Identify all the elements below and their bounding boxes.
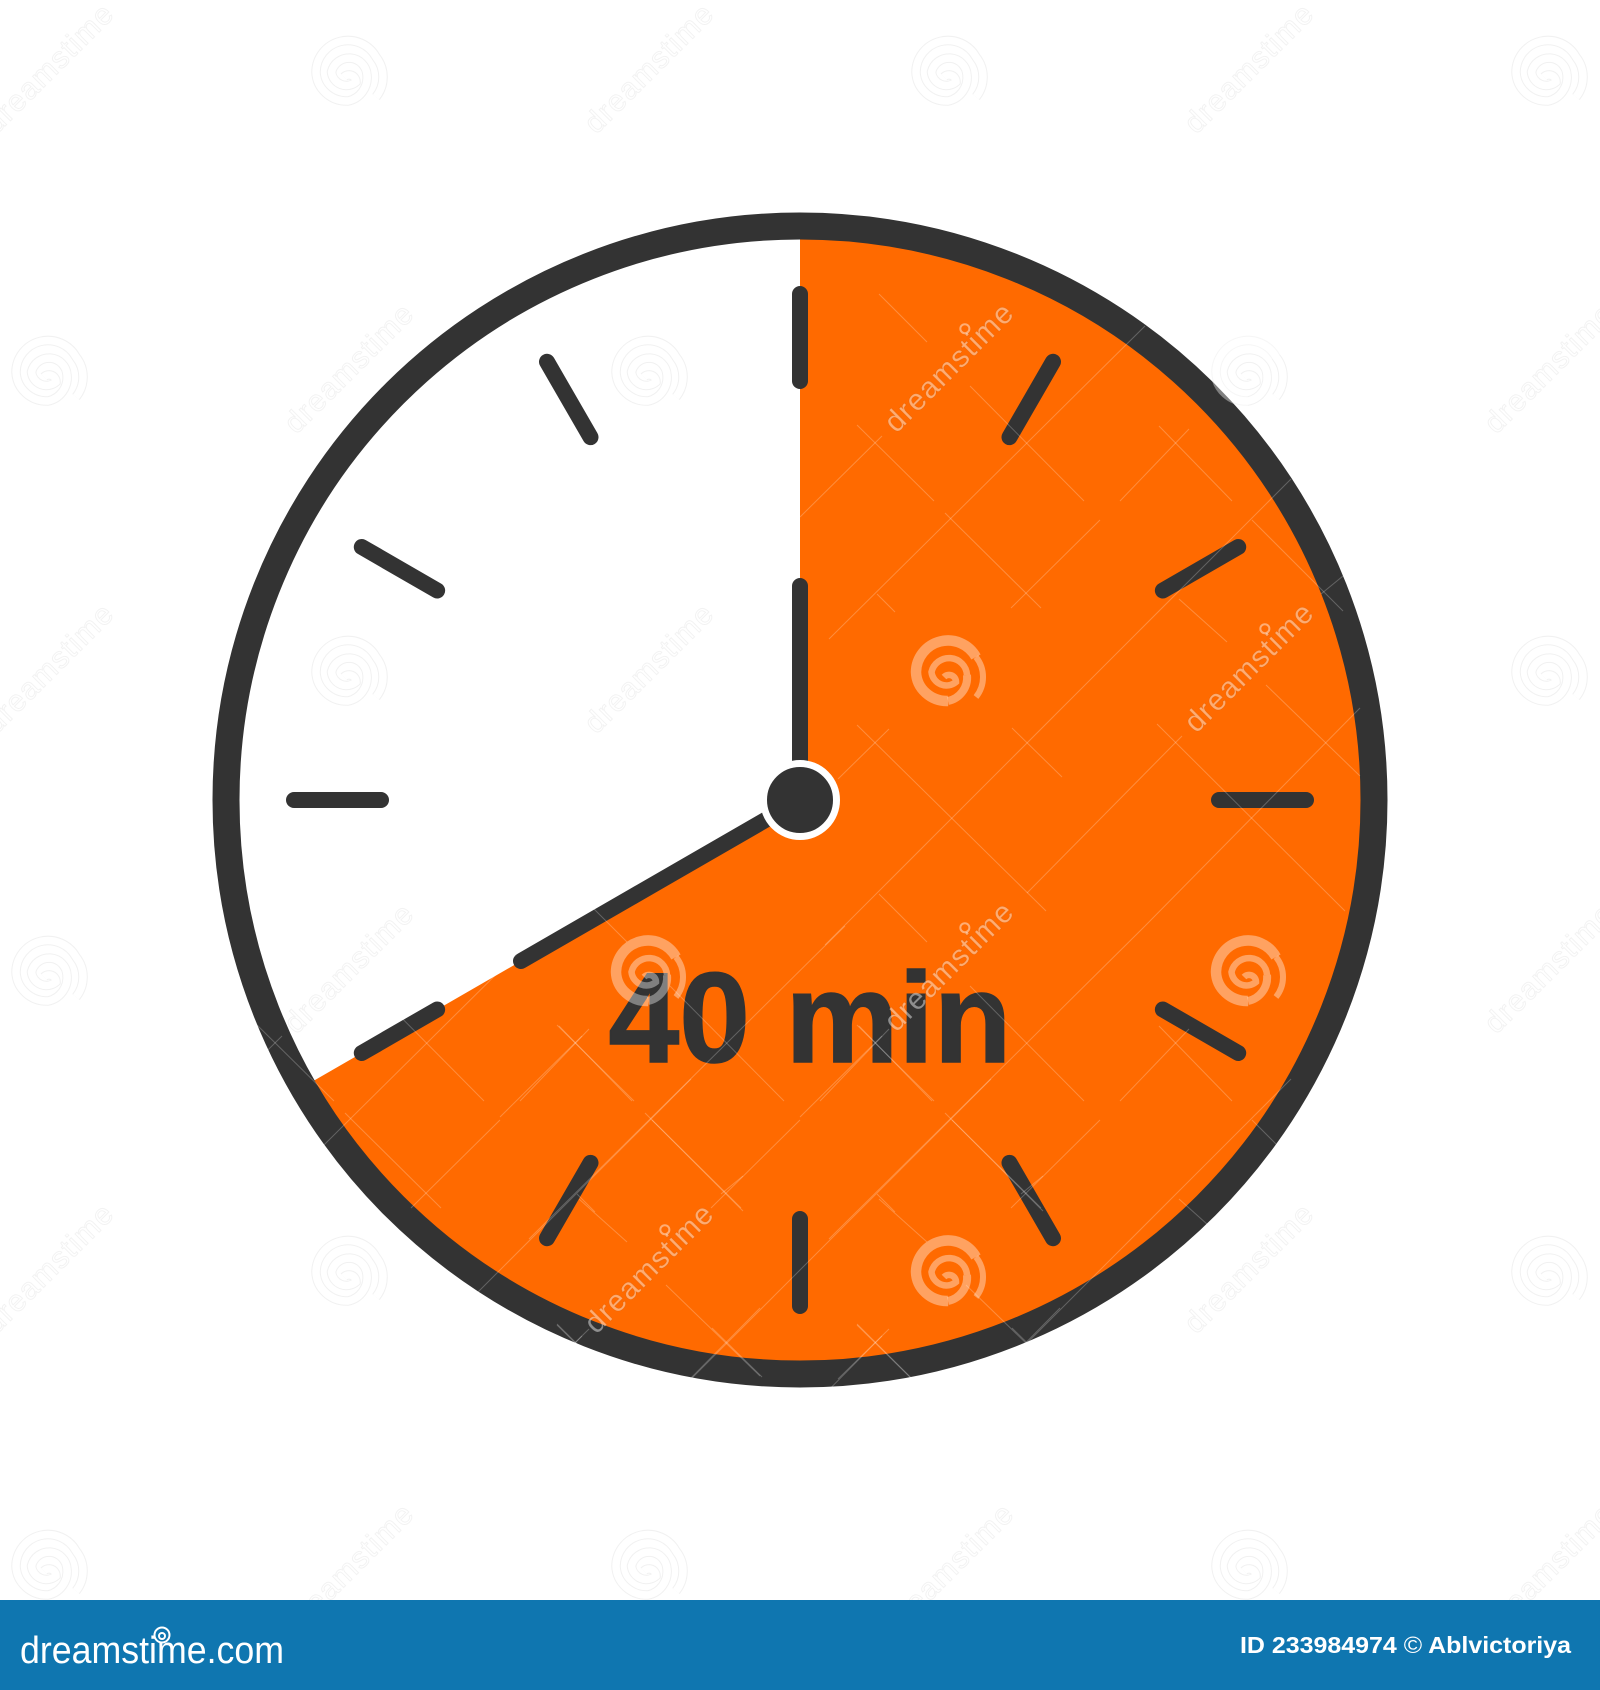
watermark text: dreamstime <box>278 898 420 1040</box>
elapsed 40 minute orange sector <box>311 235 1365 1365</box>
watermark text: dreamstime <box>578 1198 720 1340</box>
image id and author credit: ID 233984974 © Ablvictoriya <box>1240 1632 1571 1658</box>
watermark text: dreamstime <box>278 1498 420 1640</box>
footer logo spiral <box>154 1628 170 1642</box>
watermark text: dreamstime <box>278 298 420 440</box>
watermark text: dreamstime <box>878 896 1020 1038</box>
watermark text: dreamstime <box>878 297 1020 439</box>
watermark text: dreamstime <box>1178 0 1320 140</box>
watermark text: dreamstime <box>878 1498 1020 1640</box>
watermark text: dreamstime <box>578 0 720 140</box>
watermark text: dreamstime <box>578 598 720 740</box>
watermark text: dreamstime <box>1178 597 1320 739</box>
clock hands <box>521 586 800 961</box>
watermark text: dreamstime <box>1178 1198 1320 1340</box>
clock timer dial <box>226 226 1374 1374</box>
duration label: 40 min <box>608 947 1012 1090</box>
faint watermark cross lines <box>200 294 1360 1545</box>
footer logo wordmark: dreamstime.com <box>20 1630 284 1672</box>
footer bar <box>0 1600 1600 1690</box>
watermark spirals overlay <box>616 340 1283 1301</box>
hour tick marks <box>294 294 1306 1306</box>
center hub <box>764 764 836 836</box>
clock outer ring <box>226 226 1374 1374</box>
